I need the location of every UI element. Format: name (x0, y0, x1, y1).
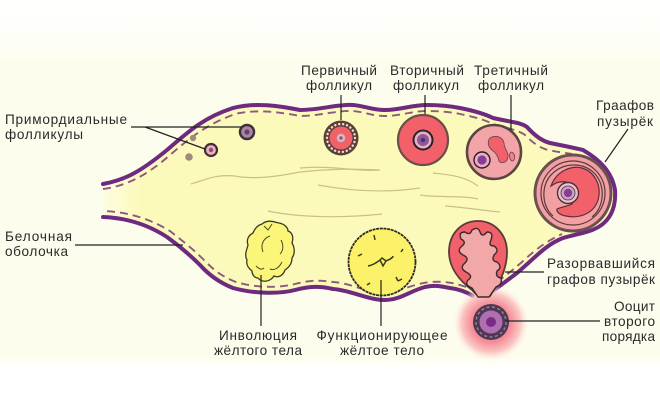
involuting corpus luteum (246, 221, 294, 281)
label: functioning corpus luteum: Функционирующее (316, 328, 448, 343)
ovary diagram: жёлтого тела (214, 343, 302, 358)
ovary diagram: графов пузырёк (547, 272, 656, 287)
ovary body (103, 105, 615, 300)
label: secondary follicle: Вторичный (390, 63, 464, 78)
oocyte glow (453, 285, 529, 361)
tertiary follicle (467, 125, 521, 179)
label: primary follicle: Первичный (301, 63, 377, 78)
label: ruptured follicle: Разорвавшийся (547, 256, 655, 271)
ovary diagram: фолликулы (5, 127, 83, 142)
label: oocyte: Ооцит (614, 299, 655, 314)
label: primordial follicles: Примордиальные (5, 112, 127, 127)
ovary diagram: фолликул (478, 78, 544, 93)
ovary diagram: пузырёк (597, 114, 654, 129)
label: tunica albuginea: Белочная (5, 229, 72, 244)
ovary diagram: фолликул (306, 78, 372, 93)
ovary diagram: порядка (602, 329, 655, 344)
leader lines (75, 95, 628, 326)
label: tertiary follicle: Третичный (474, 63, 548, 78)
ovary wall: tunica albuginea (103, 105, 615, 300)
label: involuting corpus luteum: Инволюция (219, 328, 297, 343)
primordial follicles (185, 125, 254, 161)
Graafian follicle (535, 155, 611, 231)
dashed inner wall (103, 111, 572, 293)
secondary follicle (398, 115, 448, 165)
stroma wavy lines (191, 167, 500, 217)
label: Graafian follicle: Граафов (596, 98, 654, 113)
ruptured Graafian follicle (449, 221, 507, 297)
functioning corpus luteum (348, 228, 416, 296)
ovary diagram: фолликул (393, 78, 459, 93)
ovary diagram: оболочка (5, 244, 68, 259)
ovary diagram: второго (604, 314, 655, 329)
oocyte (473, 304, 509, 340)
primary follicle (324, 120, 358, 156)
ovary diagram: жёлтое тело (340, 343, 424, 358)
